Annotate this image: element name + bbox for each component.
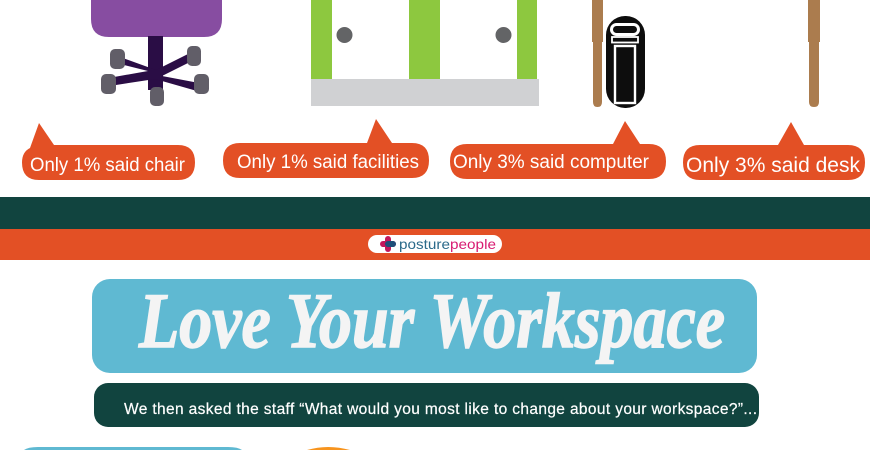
panel: question xyxy=(94,383,759,427)
band: dark teal xyxy=(0,197,870,229)
panel: question: We then asked the staff “What would you most like to change about your workspace?”... xyxy=(124,401,757,418)
logo: posturepeople pill xyxy=(368,235,502,253)
band: orange with logo xyxy=(0,229,870,260)
icon: computer tower xyxy=(606,16,645,108)
icon: facilities doors xyxy=(311,0,539,106)
icon: desk leg right xyxy=(808,0,820,107)
callout: computer xyxy=(450,121,666,179)
callout: facilities xyxy=(223,119,429,178)
icon: orange circle (cropped) xyxy=(307,447,350,450)
callout: desk: Only 3% said desk xyxy=(686,154,860,177)
callout: computer: Only 3% said computer xyxy=(453,152,650,173)
callout: chair xyxy=(22,123,195,180)
panel: title: Love Your Workspace xyxy=(138,277,725,364)
logo: posturepeople pill: people xyxy=(450,236,496,252)
callout: facilities: Only 1% said facilities xyxy=(237,152,419,173)
callout: desk xyxy=(683,122,865,180)
icon: office chair xyxy=(91,0,222,106)
callout: chair: Only 1% said chair xyxy=(30,155,186,176)
panel: answer card (cropped) xyxy=(24,447,242,450)
icon: desk leg left xyxy=(592,0,603,107)
logo: posturepeople pill: posture xyxy=(399,236,450,252)
